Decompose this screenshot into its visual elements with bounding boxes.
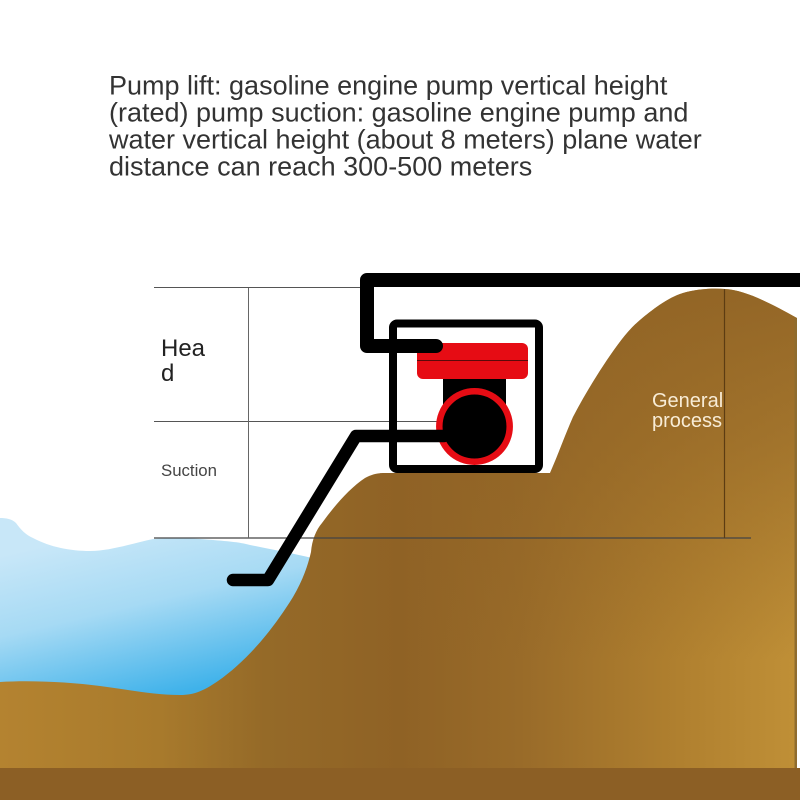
title text: distance can reach 300-500 meters [109,152,532,182]
title text [108,70,702,182]
title text: (rated) pump suction: gasoline engine pump and [109,98,688,128]
label: Head: d [161,360,174,387]
label: General process: process [652,410,722,432]
label: General process [652,390,723,432]
hill terrain [0,289,797,800]
pump housing frame [393,324,539,469]
measurement lines [154,288,751,538]
title text: Pump lift: gasoline engine pump vertical height [109,70,668,100]
title text: water vertical height (about 8 meters) plane water [108,124,702,154]
right edge strip [794,318,797,768]
pump engine [417,343,528,462]
water body [0,518,312,700]
label: Head: Hea [161,335,206,362]
pump housing background [393,324,539,469]
label: Head [161,335,206,387]
discharge pipe [367,280,800,346]
label: Suction: Suction [161,461,217,480]
label: General process: General [652,390,723,412]
suction pipe [233,436,444,580]
ground strip [0,768,800,800]
